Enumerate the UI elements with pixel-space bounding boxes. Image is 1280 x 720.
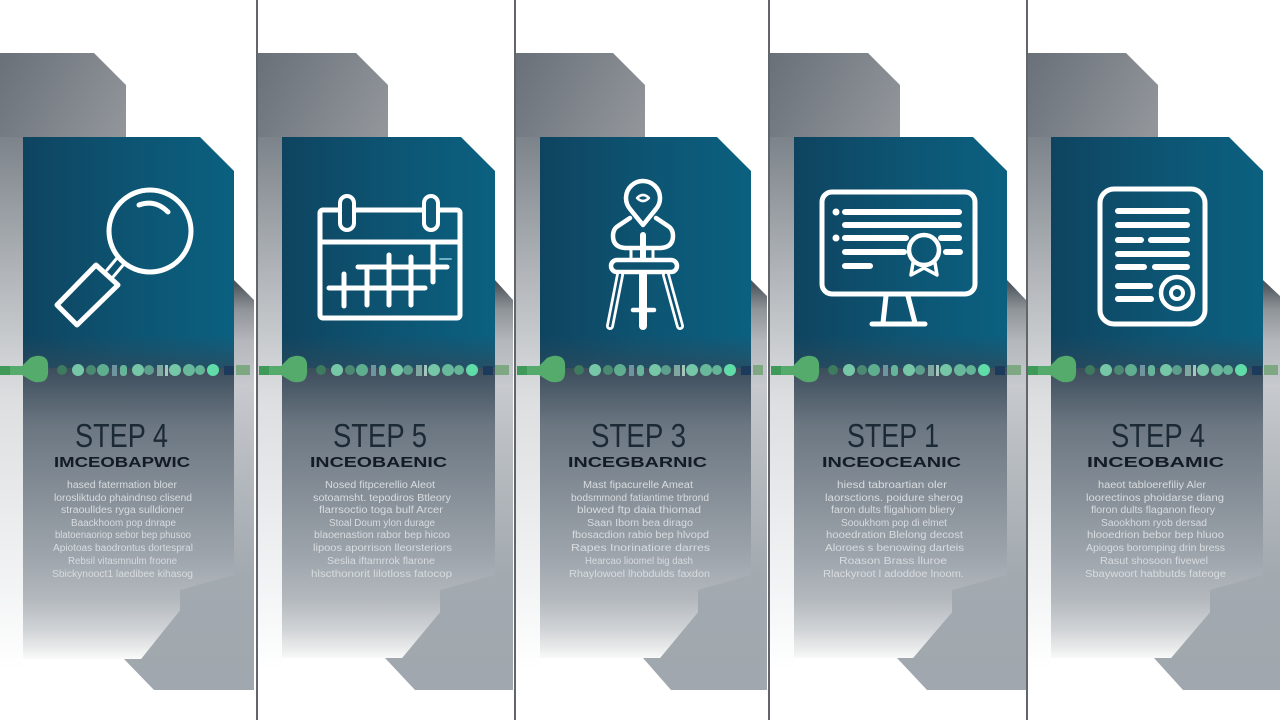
text block: description: Apiotoas baodrontus dortespral: [53, 543, 193, 554]
text block: description: blatoenaoriop sebor bep phusoo: [55, 530, 191, 541]
text block: description: hased fatermation bloer: [67, 480, 178, 491]
icon: calendar: [320, 196, 460, 318]
timeline: green marker and dots: [0, 356, 250, 382]
text block: description: laorsctions. poidure sherog: [825, 493, 963, 504]
text block: description: hooedration Blelong decost: [826, 530, 963, 541]
text block: description: Seslia iftamrrok flarone: [327, 556, 435, 567]
heading: infographic label: INCEOCEANIC: [822, 454, 961, 471]
panel: step 3 compass: [516, 53, 767, 690]
text block: description: Baackhoom pop dnrape: [71, 518, 176, 529]
text block: description: Apiogos boromping drin bress: [1086, 543, 1225, 554]
timeline: green marker and dots: [517, 356, 763, 382]
text block: description: [311, 480, 452, 580]
text block: description: [1085, 480, 1226, 580]
heading: infographic label: INCEOBAENIC: [310, 454, 447, 471]
text block: description: Sbickynooct1 laedibee kihasog: [52, 569, 193, 580]
heading: step number: STEP 4: [1111, 417, 1205, 454]
icon: document with seal: [1100, 189, 1205, 324]
text block: description: Rhaylowoel lhobdulds faxdon: [569, 569, 710, 580]
icon: compass with pin: [610, 181, 680, 326]
heading: infographic label: INCEOBAMIC: [1087, 454, 1224, 471]
text block: description: Saookhom ryob dersad: [1101, 518, 1207, 529]
text block: description: Roason Brass lluroe: [839, 556, 948, 567]
text block: description: Nosed fitpcerellio Aleot: [325, 480, 435, 491]
text block: description: Rebsil vitasmnulm froone: [68, 556, 177, 567]
text block: description: floron dults flaganon fleory: [1091, 505, 1215, 516]
panel: step 4 document: [1028, 53, 1280, 690]
text block: description: Sbaywoort habbutds fateoge: [1085, 569, 1226, 580]
heading: step number: STEP 5: [333, 417, 427, 454]
timeline: green marker and dots: [771, 356, 1021, 382]
text block: description: [823, 480, 964, 580]
text block: description: Stoal Doum ylon durage: [329, 518, 435, 529]
text block: description: Rlackyroot l adoddoe lnoom.: [823, 569, 964, 580]
text block: description: fbosacdion rabio bep hlvopd: [572, 530, 709, 541]
text block: description: flarrsoctio toga bulf Arcer: [319, 505, 444, 516]
timeline: green marker and dots: [259, 356, 509, 382]
text block: description: hlscthonorit lilotloss fatocop: [311, 569, 452, 580]
text block: description: Saan Ibom bea dirago: [587, 518, 693, 529]
text block: description: bodsmmond fatiantime trbrond: [571, 493, 709, 504]
text block: description: hiesd tabroartian oler: [837, 480, 948, 491]
heading: step number: STEP 1: [847, 417, 939, 454]
text block: description: Hearcao lioomel big dash: [585, 556, 693, 567]
heading: step number: STEP 4: [75, 417, 168, 454]
text block: description: sotoamsht. tepodiros Btleory: [313, 493, 451, 504]
text block: description: haeot tabloerefiliy Aler: [1098, 480, 1207, 491]
panel: step 4 magnifier: [0, 53, 254, 690]
text block: description: Rasut shosoon fivewel: [1100, 556, 1208, 567]
heading: infographic label: INCEGBARNIC: [568, 454, 707, 471]
heading: step number: STEP 3: [591, 417, 686, 454]
text block: description: straoulldes ryga sulldioner: [61, 505, 185, 516]
text block: description: Aloroes s benowing darteis: [825, 543, 964, 554]
heading: infographic label: IMCEOBAPWIC: [54, 454, 190, 471]
text block: description: hlooedrion bebor bep hluoo: [1087, 530, 1224, 541]
text block: description: lorosliktudo phaindnso clisend: [54, 493, 192, 504]
text block: description: Sooukhom pop di elmet: [841, 518, 947, 529]
panel: step 1 monitor: [770, 53, 1026, 690]
text block: description: blaoenastion rabor bep hicoo: [314, 530, 450, 541]
text block: description: Mast fipacurelle Ameat: [583, 480, 693, 491]
text block: description: faron dults fligahiom bliery: [831, 505, 955, 516]
text block: description: loorectinos phoidarse diang: [1086, 493, 1224, 504]
text block: description: blowed ftp daia thiomad: [577, 505, 701, 516]
text block: description: Rapes Inorinatiore darres: [571, 543, 710, 554]
icon: monitor with certificate: [822, 192, 975, 324]
timeline: green marker and dots: [1028, 356, 1278, 382]
text block: description: [569, 480, 710, 580]
icon: magnifying glass: [57, 190, 191, 325]
text block: description: lipoos aporrison lleorsteriors: [313, 543, 452, 554]
text block: description: [52, 480, 193, 580]
panel: step 5 calendar: [258, 53, 513, 690]
